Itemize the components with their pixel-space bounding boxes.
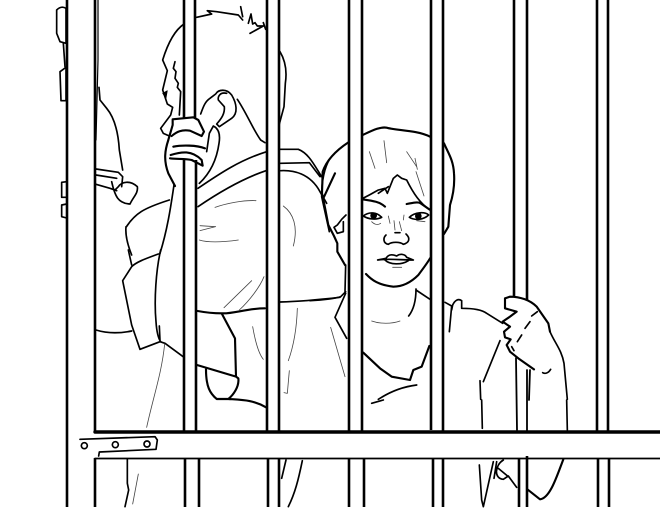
face bbox=[363, 199, 430, 287]
lower bar segments bbox=[95, 456, 609, 507]
man's hand gripping the bar bbox=[165, 117, 220, 186]
horizontal rails bbox=[95, 432, 660, 458]
neck and shirt bbox=[310, 265, 567, 399]
hair outline bbox=[322, 127, 454, 265]
girl's hand gripping the bar bbox=[503, 297, 551, 373]
figure at far left with chain bbox=[57, 7, 137, 218]
thin body lines between the bars near the rail bbox=[372, 400, 567, 507]
girl's head and torso bbox=[310, 127, 567, 399]
icon: door hinge bbox=[80, 437, 157, 456]
man's lower body and sleeves bbox=[96, 250, 340, 507]
man seen in profile bbox=[126, 7, 330, 255]
